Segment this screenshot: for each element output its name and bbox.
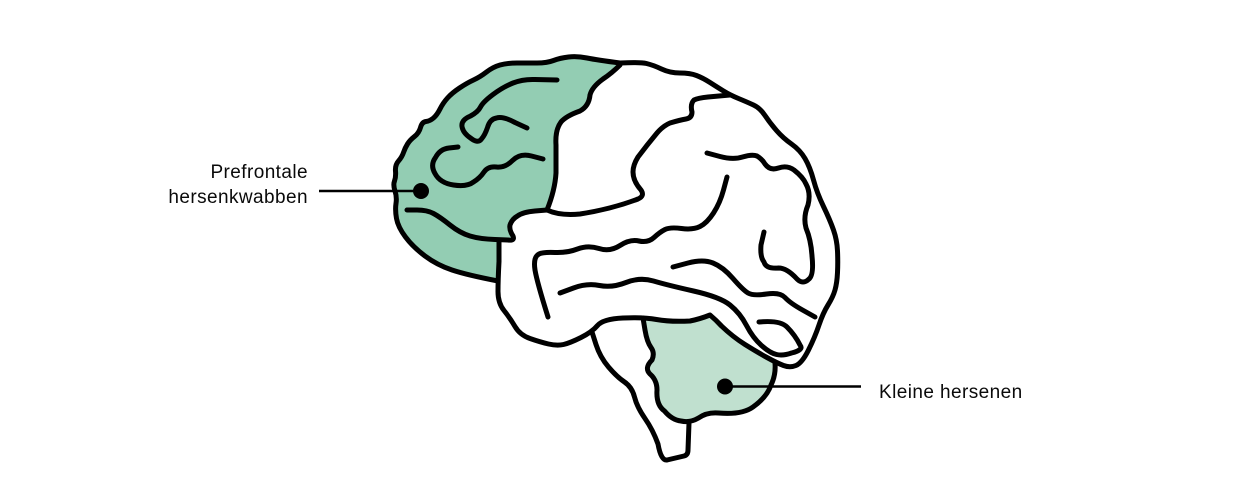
sulcus: top prefrontal xyxy=(462,79,557,141)
sulcus: rear temporal xyxy=(673,261,815,317)
leader: prefrontal lobes xyxy=(319,183,429,199)
sulcus: temporal long xyxy=(560,279,801,355)
sulcus: lower prefrontal xyxy=(433,147,543,186)
brain diagram xyxy=(394,57,838,460)
cerebellum boundary xyxy=(643,318,775,422)
region: cerebellum fill xyxy=(643,315,775,422)
boundary: frontal fold and central sulcus xyxy=(407,95,730,240)
region: prefrontal lobes fill xyxy=(394,57,620,281)
leader: cerebellum xyxy=(717,378,861,394)
sulcus: parietal winding xyxy=(707,153,813,282)
label: cerebellum: Kleine hersenen xyxy=(879,382,1023,403)
brain stem xyxy=(592,332,689,460)
brain outline: rear and underside xyxy=(498,63,838,367)
label: prefrontal lobes: Prefrontale xyxy=(210,162,308,183)
boundary: prefrontal right edge xyxy=(547,65,620,210)
brain outline: front lobe edge xyxy=(394,57,620,281)
sulcus: temporal upper xyxy=(534,177,727,317)
label: prefrontal lobes: hersenkwabben xyxy=(168,187,308,208)
